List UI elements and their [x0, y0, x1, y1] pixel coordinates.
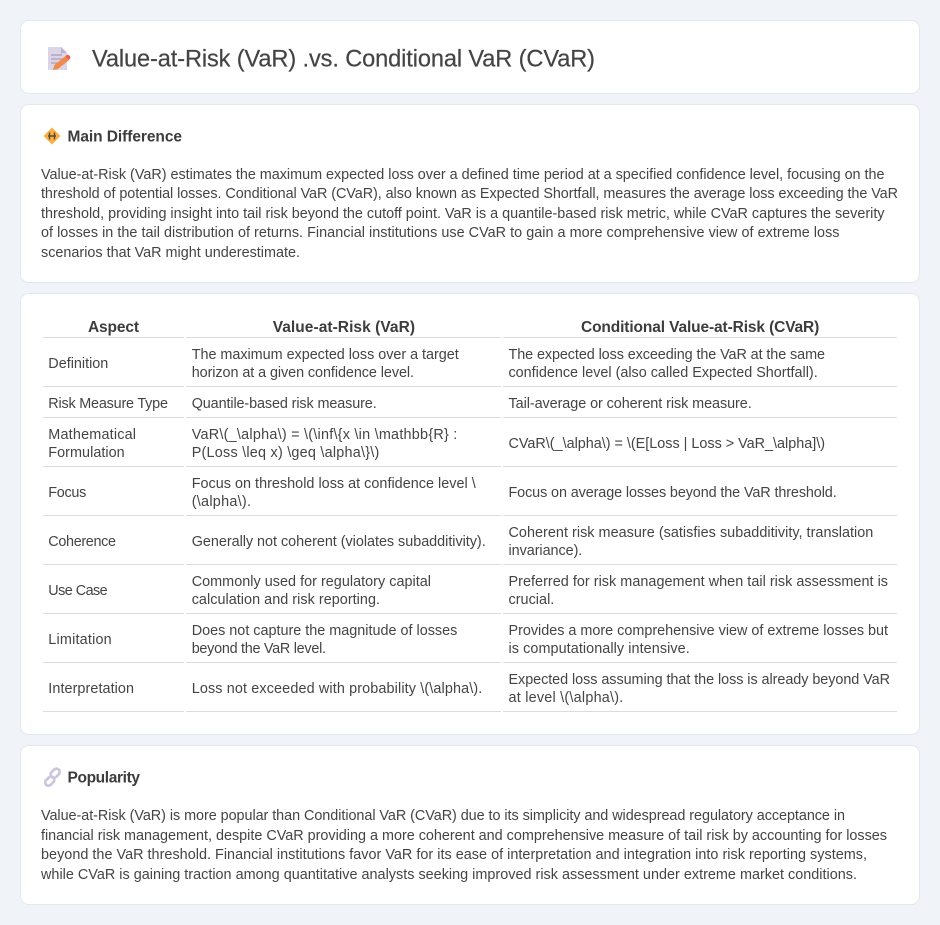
table row: limitation: Limitation	[48, 632, 112, 648]
table row: definition	[48, 347, 825, 381]
table row: risk measure type: Risk Measure Type	[48, 396, 168, 412]
icon: chain link	[44, 767, 61, 787]
text block: main difference paragraph: Value-at-Risk (VaR) estimates the maximum expected loss over a defined time period at a specified confidence level, focusing on the	[41, 167, 884, 183]
table row: interpretation: Loss not exceeded with probability \(\alpha\).	[192, 681, 482, 697]
title: Value-at-Risk (VaR) .vs. Conditional VaR (CVaR)	[92, 46, 595, 72]
table row: use case	[48, 574, 888, 608]
table row: coherence: Generally not coherent (violates subadditivity).	[192, 534, 486, 550]
table row: interpretation: Expected loss assuming that the loss is already beyond VaR	[508, 672, 890, 688]
table row: use case: Commonly used for regulatory capital	[192, 574, 431, 590]
table row: focus	[48, 476, 837, 510]
table row: use case: crucial.	[508, 592, 554, 608]
table row: focus: (\alpha\).	[192, 494, 251, 510]
heading: popularity: Popularity	[68, 770, 140, 787]
table row: mathematical formulation: P(Loss \leq x) \geq \alpha\}\)	[192, 445, 379, 461]
panel: main difference	[20, 104, 920, 282]
table row: focus: Focus	[48, 485, 86, 501]
table row: interpretation	[48, 672, 890, 706]
heading: main difference: Main Difference	[68, 129, 182, 146]
panel: popularity	[20, 746, 920, 904]
text block: popularity paragraph	[40, 808, 887, 883]
table header row: Aspect	[88, 319, 139, 336]
table row: limitation: beyond the VaR level.	[192, 641, 326, 657]
text block: popularity paragraph: while CVaR is gaining traction among quantitative analysts seeking improved risk assessment under extreme market conditions.	[40, 867, 857, 883]
table row: use case: Preferred for risk management when tail risk assessment is	[508, 574, 888, 590]
table row: definition: confidence level (also called Expected Shortfall).	[508, 365, 818, 381]
icon: warning diamond	[44, 128, 60, 144]
table header row: Conditional Value-at-Risk (CVaR)	[581, 319, 819, 336]
table row: focus: Focus on threshold loss at confidence level \	[192, 476, 476, 492]
panel: comparison table	[20, 294, 920, 734]
table row: mathematical formulation: CVaR\(_\alpha\) = \(E[Loss | Loss > VaR_\alpha]\)	[508, 436, 825, 452]
table row: limitation	[48, 623, 888, 657]
table row: focus: Focus on average losses beyond the VaR threshold.	[508, 485, 837, 501]
table row: mathematical formulation: Formulation	[48, 445, 125, 461]
table row: use case: Use Case	[48, 583, 108, 599]
table row: risk measure type	[48, 396, 752, 412]
table row: risk measure type: Tail-average or coherent risk measure.	[508, 396, 752, 412]
text block: popularity paragraph: Value-at-Risk (VaR) is more popular than Conditional VaR (CVaR) due to its simplicity and widespread regulatory acceptance in	[41, 808, 845, 824]
table row: limitation: is computationally intensive.	[508, 641, 690, 657]
table header row	[88, 319, 819, 336]
table row: definition: The expected loss exceeding the VaR at the same	[508, 347, 825, 363]
table row: limitation: Provides a more comprehensive view of extreme losses but	[508, 623, 888, 639]
panel: title header	[20, 20, 920, 94]
table row: interpretation: at level \(\alpha\).	[508, 690, 623, 706]
text block: popularity paragraph: financial risk management, despite CVaR providing a more coherent and comprehensive measure of tail risk by accounting for losses	[41, 828, 887, 844]
table row: coherence: Coherence	[48, 534, 116, 550]
table row: definition: Definition	[48, 356, 108, 372]
text block: popularity paragraph: beyond the VaR threshold. Financial institutions favor VaR for its ease of interpretation and integration into risk reporting systems,	[41, 847, 867, 863]
text block: main difference paragraph: threshold of potential losses. Conditional VaR (CVaR), also known as Expected Shortfall, measures the average loss exceeding the VaR	[41, 186, 898, 202]
table row: coherence	[48, 525, 873, 559]
table row: use case: calculation and risk reporting.	[192, 592, 380, 608]
text block: main difference paragraph: of losses in the tail distribution of returns. Financial institutions use CVaR to gain a more comprehensive view of extreme loss	[41, 225, 840, 241]
table row: mathematical formulation	[48, 427, 825, 461]
table row: definition: horizon at a given confidence level.	[192, 365, 414, 381]
table row: definition: The maximum expected loss over a target	[192, 347, 459, 363]
table row: limitation: Does not capture the magnitude of losses	[192, 623, 457, 639]
table header row: Value-at-Risk (VaR)	[273, 319, 415, 336]
text block: main difference paragraph: scenarios that VaR might underestimate.	[41, 245, 300, 261]
table row: interpretation: Interpretation	[48, 681, 134, 697]
text block: main difference paragraph	[41, 167, 898, 261]
table row: coherence: invariance).	[508, 543, 582, 559]
table row: mathematical formulation: VaR\(_\alpha\) = \(\inf\{x \in \mathbb{R} :	[192, 427, 457, 443]
table row: risk measure type: Quantile-based risk measure.	[192, 396, 377, 412]
icon: document with pencil	[48, 47, 70, 70]
table row: mathematical formulation: Mathematical	[48, 427, 136, 443]
text block: main difference paragraph: threshold, providing insight into tail risk beyond the cutoff point. VaR is a quantile-based risk metric, while CVaR captures the severity	[41, 206, 885, 222]
table row: coherence: Coherent risk measure (satisfies subadditivity, translation	[508, 525, 873, 541]
